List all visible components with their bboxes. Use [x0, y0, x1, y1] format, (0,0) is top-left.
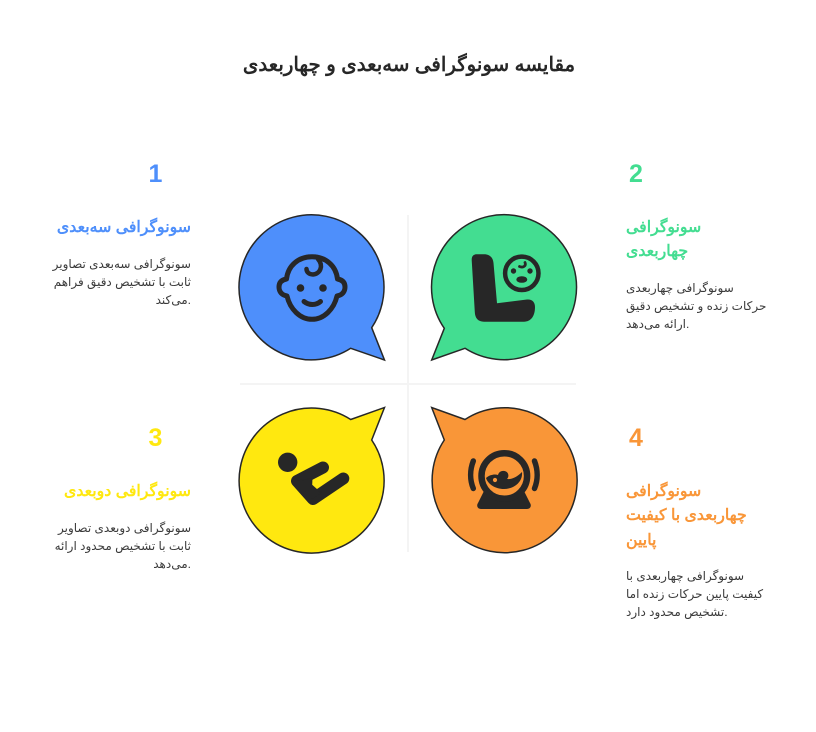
icon: ultrasound scanner [471, 453, 537, 509]
item 3 description [55, 521, 191, 571]
title: مقایسه سونوگرافی سه‌بعدی و چهاربعدی [243, 54, 575, 76]
item 4 description [626, 569, 764, 619]
item 4 heading: سونوگرافی [626, 483, 701, 500]
item 3 number: 3 [148, 424, 162, 452]
item 1 number: 1 [148, 160, 162, 188]
item 3 description: می‌دهد. [153, 557, 191, 571]
bubble: yellow with curled figure icon [239, 408, 384, 553]
item 2 number: 2 [629, 160, 643, 188]
item 4 number: 4 [629, 424, 643, 452]
bubble: blue with baby face icon [239, 215, 384, 360]
item 2 heading: سونوگرافی [626, 219, 701, 236]
item 4 heading: چهاربعدی با کیفیت [626, 507, 747, 524]
item 4 description: تشخیص محدود دارد. [626, 605, 728, 619]
item 2 description: حرکات زنده و تشخیص دقیق [626, 299, 766, 313]
item 1 description: می‌کند. [156, 293, 191, 307]
item 1 heading: سونوگرافی سه‌بعدی [57, 219, 191, 236]
icon: baby seat and face [472, 254, 538, 322]
item 2 heading: چهاربعدی [626, 243, 688, 260]
item 1 description [52, 257, 191, 307]
icon: curled figure [278, 453, 343, 499]
item 2 description: ارائه می‌دهد. [626, 317, 689, 331]
item 4 heading [626, 481, 747, 550]
item 3 description: ثابت با تشخیص محدود ارائه [55, 539, 191, 553]
item 3 description: سونوگرافی دوبعدی تصاویر [58, 521, 191, 535]
bubble: green with baby seat icon [432, 215, 577, 360]
item 2 description: سونوگرافی چهاربعدی [626, 281, 734, 295]
item 2 heading [626, 217, 701, 260]
item 2 description [626, 281, 766, 331]
item 4 description: سونوگرافی چهاربعدی با [626, 569, 744, 583]
item 4 description: کیفیت پایین حرکات زنده اما [626, 587, 763, 601]
icon: baby face [279, 257, 345, 319]
item 4 heading: پایین [626, 532, 656, 549]
item 1 description: سونوگرافی سه‌بعدی تصاویر [53, 257, 191, 271]
item 1 description: ثابت با تشخیص دقیق فراهم [54, 275, 191, 289]
item 3 heading: سونوگرافی دوبعدی [64, 483, 191, 500]
bubble: orange with ultrasound icon [432, 408, 577, 553]
